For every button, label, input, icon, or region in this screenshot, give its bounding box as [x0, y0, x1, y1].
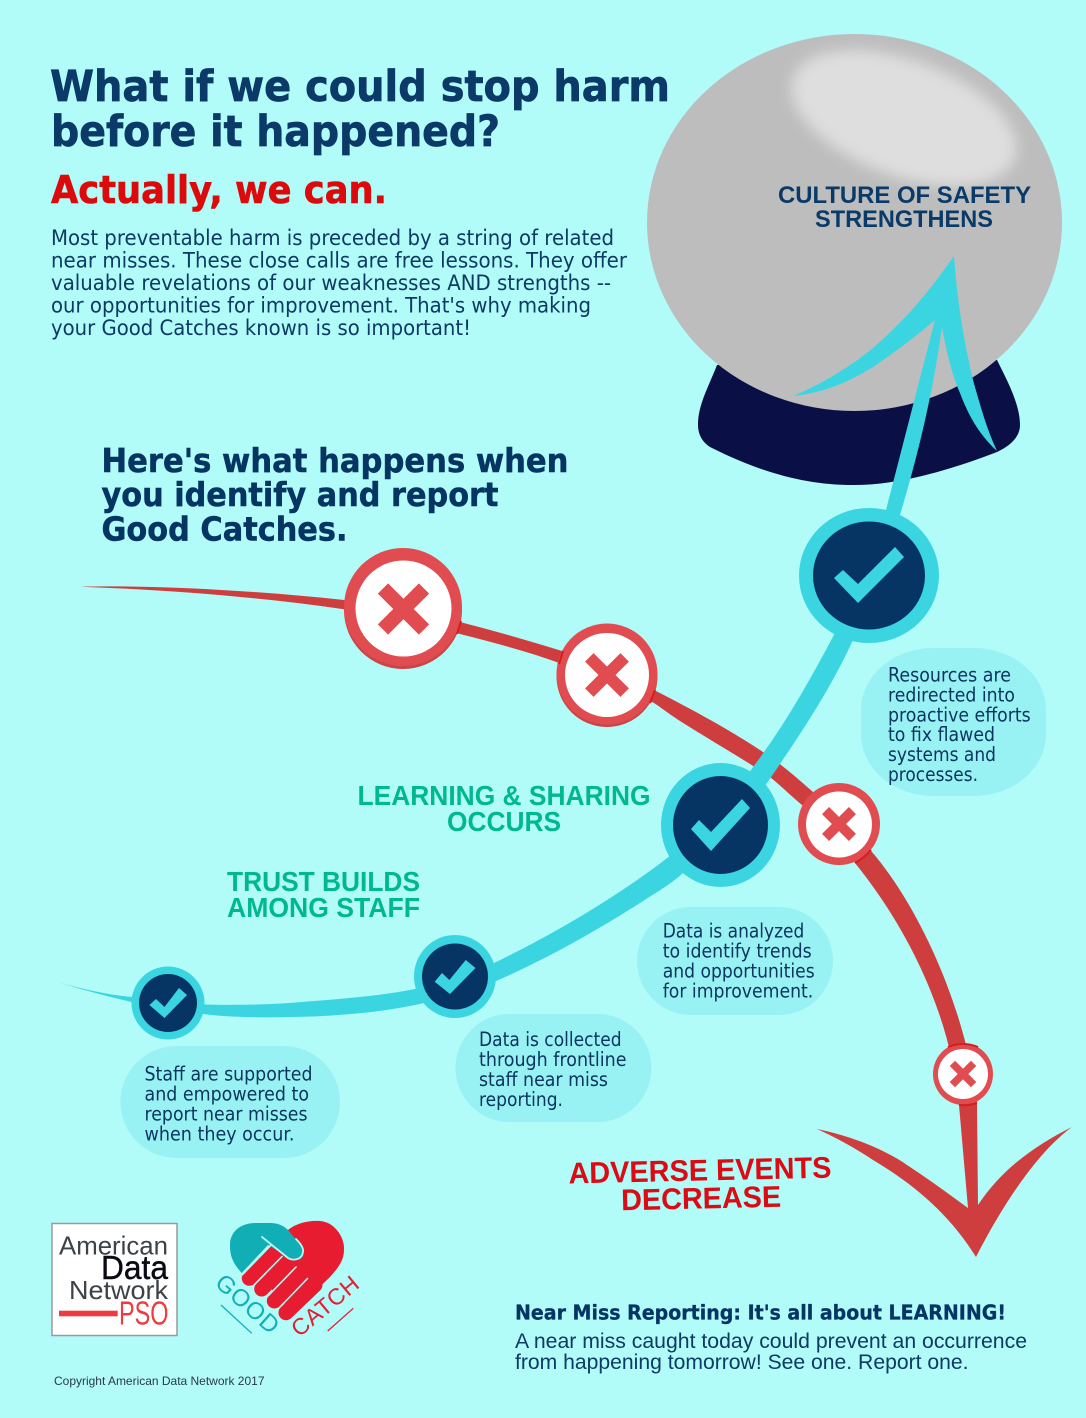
- red x marker 2: [556, 624, 658, 727]
- label: trust builds: TRUST BUILDS: [227, 866, 420, 897]
- closing statement: [515, 1300, 1027, 1374]
- label: culture of safety strengthens: STRENGTHENS: [815, 206, 993, 233]
- closing statement: Near Miss Reporting: It's all about LEARNING!: [515, 1300, 1006, 1324]
- bubble: data analyzed: for improvement.: [663, 979, 813, 1002]
- red x marker 3: [798, 783, 880, 865]
- label: culture of safety strengthens: CULTURE OF SAFETY: [778, 182, 1031, 209]
- title: [50, 62, 670, 157]
- word: CATCH: CATCH: [286, 1270, 364, 1342]
- intro paragraph: Most preventable harm is preceded by a string of related: [51, 226, 614, 251]
- heading: what happens: you identify and report: [102, 475, 499, 514]
- intro paragraph: [51, 226, 627, 341]
- red x marker 4: [933, 1043, 993, 1105]
- label: adverse events decrease: ADVERSE EVENTS: [568, 1152, 832, 1190]
- copyright: Copyright American Data Network 2017: [54, 1374, 265, 1388]
- bubble: resources: proactive efforts: [888, 703, 1031, 726]
- label: adverse events decrease: DECREASE: [621, 1181, 781, 1217]
- bubble: data collected: [456, 1014, 652, 1122]
- bubble: data analyzed: and opportunities: [663, 959, 815, 982]
- label: culture of safety strengthens: [778, 182, 1031, 233]
- intro paragraph: valuable revelations of our weaknesses AND strengths --: [51, 271, 611, 296]
- bubble: staff supported: and empowered to: [144, 1083, 309, 1106]
- crystal ball sphere: [647, 34, 1062, 411]
- heading: what happens: Good Catches.: [102, 510, 348, 548]
- label: learning and sharing: LEARNING & SHARING: [358, 780, 650, 811]
- heading: what happens: Here's what happens when: [102, 441, 568, 480]
- red downward arrow: adverse events path: [81, 586, 1072, 1257]
- bubble: resources: systems and: [888, 743, 996, 766]
- intro paragraph: near misses. These close calls are free lessons. They offer: [51, 248, 627, 274]
- label: learning and sharing: [358, 780, 650, 837]
- title: before it happened?: [51, 107, 500, 157]
- intro paragraph: your Good Catches known is so important!: [51, 316, 471, 341]
- label: adverse events decrease: [568, 1152, 832, 1218]
- word: GOOD: GOOD: [210, 1269, 284, 1340]
- bubble: staff supported: report near misses: [144, 1103, 308, 1126]
- logo: Good Catch: [210, 1221, 364, 1342]
- logo: American Data Network PSO: American: [59, 1231, 168, 1261]
- crystal ball base: [698, 360, 1020, 485]
- bubble: data analyzed: to identify trends: [663, 939, 812, 962]
- red underline: [328, 1308, 353, 1331]
- check marker 1: [132, 966, 204, 1040]
- closing statement: from happening tomorrow! See one. Report one.: [515, 1350, 968, 1374]
- cyan upward arrow: safety path: [58, 256, 997, 1017]
- red x marker 1: [344, 548, 462, 669]
- bubble: data collected: Data is collected: [479, 1028, 622, 1051]
- check marker 2: [414, 935, 496, 1018]
- crystal ball: [647, 23, 1062, 485]
- heading: what happens: [102, 441, 568, 548]
- logo: American Data Network PSO: Network: [69, 1275, 169, 1305]
- bubble: data analyzed: Data is analyzed: [663, 919, 804, 942]
- label: trust builds: AMONG STAFF: [227, 892, 420, 923]
- bubble: resources: Resources are: [888, 664, 1011, 687]
- check marker 4: [799, 508, 939, 643]
- closing statement: A near miss caught today could prevent an occurrence: [515, 1329, 1027, 1353]
- check marker 3: [661, 763, 780, 887]
- teal underline: [221, 1305, 252, 1333]
- intro paragraph: our opportunities for improvement. That's why making: [51, 294, 591, 318]
- logo: American Data Network PSO: Data: [101, 1249, 169, 1286]
- red hand: [249, 1221, 344, 1313]
- logo: American Data Network PSO: [52, 1224, 177, 1336]
- logo: American Data Network PSO: PSO: [119, 1295, 168, 1332]
- bubble: staff supported: Staff are supported: [144, 1063, 312, 1086]
- bubble: data collected: reporting.: [479, 1088, 563, 1111]
- crystal ball highlight: [788, 46, 1020, 190]
- bubble: data analyzed: [637, 907, 833, 1015]
- bubble: staff supported: [120, 1046, 340, 1158]
- label: trust builds: [227, 866, 420, 923]
- bubble: resources: [861, 648, 1046, 796]
- subtitle: Actually, we can.: [51, 168, 387, 212]
- bubble: resources: processes.: [888, 763, 978, 786]
- label: learning and sharing: OCCURS: [447, 806, 561, 837]
- bubble: data collected: staff near miss: [479, 1068, 608, 1091]
- teal hand: [230, 1223, 304, 1273]
- bubble: resources: to fix flawed: [888, 723, 995, 746]
- bubble: data collected: through frontline: [479, 1048, 626, 1071]
- title: What if we could stop harm: [50, 62, 670, 112]
- bubble: staff supported: when they occur.: [144, 1123, 294, 1146]
- bubble: resources: redirected into: [888, 684, 1015, 707]
